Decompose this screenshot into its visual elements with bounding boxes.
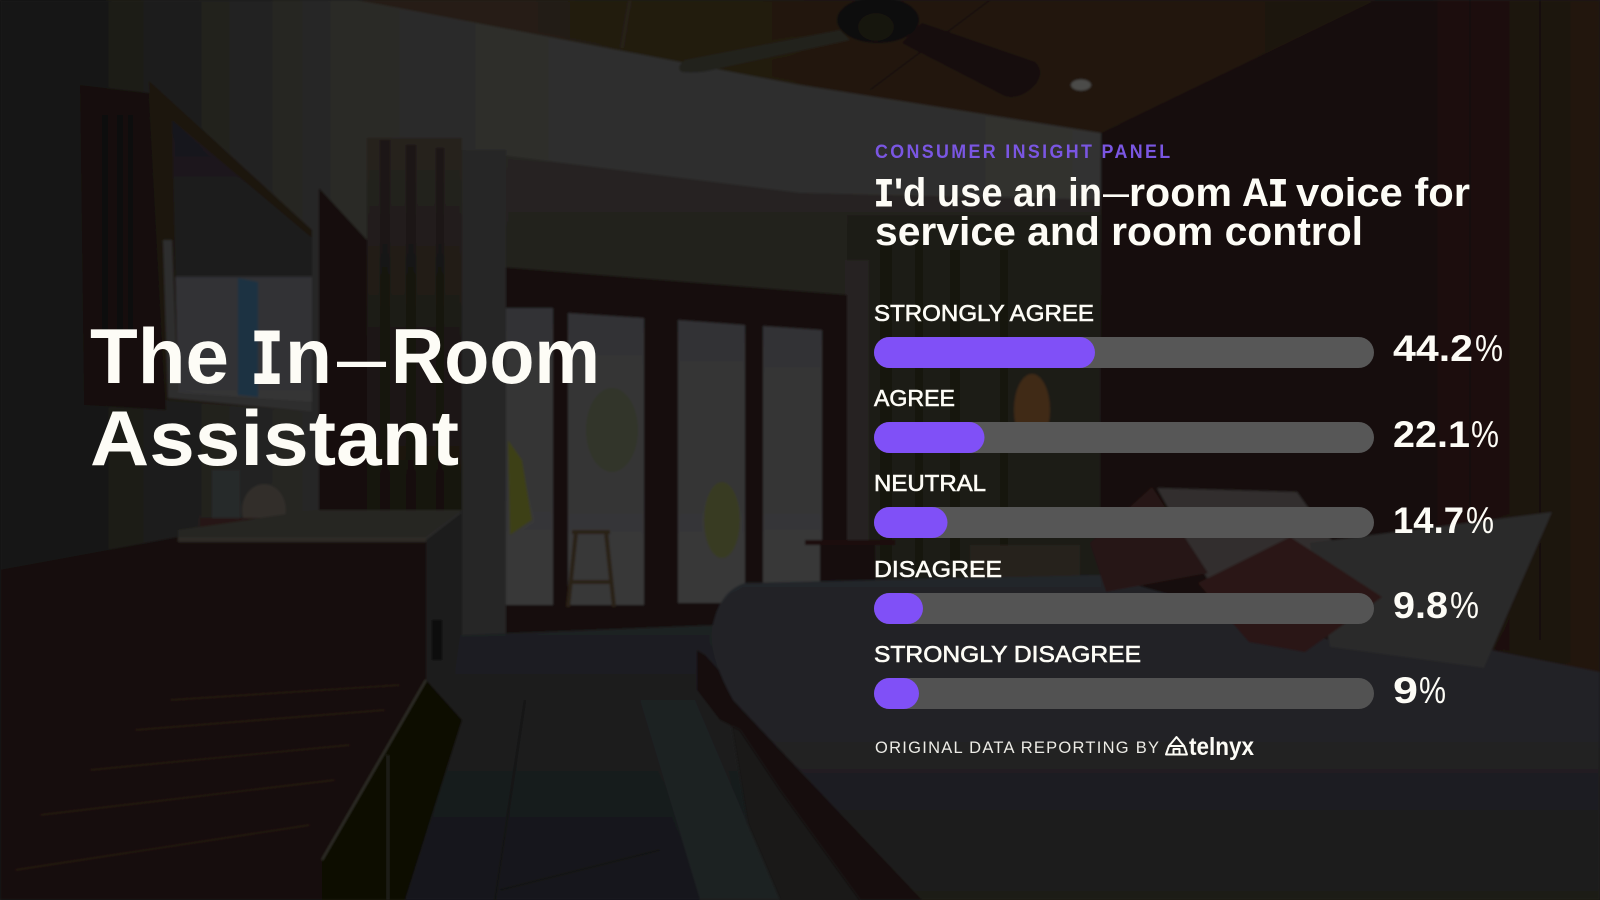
row: neutral bbox=[874, 470, 1494, 541]
cabinet side bbox=[426, 512, 462, 800]
ceiling fan blade right bbox=[902, 23, 1040, 97]
ceiling fan hub bbox=[837, 0, 919, 43]
door frame bbox=[500, 267, 847, 640]
eyebrow: consumer insight panel: CONSUMER INSIGHT PANEL bbox=[875, 140, 1170, 162]
side table bbox=[805, 540, 895, 545]
row: agree bbox=[874, 385, 1499, 455]
row: strongly agree: % bbox=[1475, 328, 1503, 369]
wood ceiling bbox=[357, 0, 1376, 133]
main title: — bbox=[337, 313, 386, 401]
row: agree: % bbox=[1471, 414, 1499, 455]
wall panel behind TV bbox=[80, 85, 166, 410]
TV frame bbox=[149, 81, 312, 412]
row: strongly agree: STRONGLY AGREE bbox=[874, 300, 1094, 326]
row: disagree: DISAGREE bbox=[874, 556, 1002, 582]
survey question heading: — bbox=[1103, 171, 1129, 215]
survey question heading: voice for bbox=[1296, 171, 1470, 215]
icon: telnyx logo mark bbox=[1166, 737, 1187, 754]
wainscot left bbox=[0, 537, 178, 900]
bench side bbox=[322, 680, 462, 900]
ceiling light bbox=[1071, 80, 1091, 90]
row: neutral: NEUTRAL bbox=[874, 470, 986, 496]
sheer curtain bbox=[462, 150, 506, 640]
main title: I bbox=[251, 319, 283, 407]
white pillow back bbox=[1157, 488, 1335, 580]
survey question heading: I bbox=[1268, 173, 1288, 218]
survey question heading: A bbox=[1242, 171, 1269, 215]
cabinet top bbox=[178, 510, 462, 537]
row: strongly disagree: STRONGLY DISAGREE bbox=[874, 641, 1141, 667]
TV screen bbox=[172, 120, 312, 402]
dark curtain bbox=[367, 138, 462, 510]
row: agree: AGREE bbox=[874, 385, 955, 411]
items on cabinet bbox=[212, 470, 240, 540]
wood wall right bbox=[1100, 0, 1600, 680]
duvet bbox=[712, 575, 1600, 900]
row: agree: 22.1 bbox=[1393, 414, 1470, 455]
main title: n bbox=[285, 312, 332, 400]
row: strongly disagree: % bbox=[1419, 670, 1446, 711]
row: disagree bbox=[874, 556, 1479, 626]
row: disagree: % bbox=[1450, 585, 1479, 626]
cabinet front bbox=[178, 542, 426, 692]
row: strongly agree bbox=[874, 300, 1503, 369]
survey question heading: room bbox=[1129, 171, 1232, 215]
row: strongly disagree bbox=[874, 641, 1446, 711]
main title: The bbox=[90, 312, 229, 400]
survey question heading bbox=[874, 171, 1470, 254]
far curtain bbox=[847, 215, 1100, 580]
telnyx wordmark: telnyx bbox=[1189, 733, 1254, 761]
survey question heading: 'd use an in bbox=[894, 171, 1102, 215]
survey question heading: service and room control bbox=[875, 210, 1363, 254]
main title bbox=[90, 312, 600, 482]
bench bbox=[0, 680, 426, 900]
red pillow right bbox=[1198, 537, 1382, 652]
footer: source credit: ORIGINAL DATA REPORTING BY bbox=[875, 739, 1159, 757]
bar chart: survey responses bbox=[874, 300, 1503, 711]
window panes bbox=[505, 308, 553, 605]
footer: source credit bbox=[875, 733, 1254, 761]
row: strongly disagree: 9 bbox=[1393, 670, 1418, 711]
stool bbox=[568, 532, 614, 607]
red pillow left bbox=[1090, 487, 1208, 592]
row: disagree: 9.8 bbox=[1393, 585, 1448, 626]
row: strongly agree: 44.2 bbox=[1393, 328, 1473, 369]
tapestry on wood wall bbox=[1225, 82, 1412, 430]
row: neutral: % bbox=[1466, 500, 1494, 541]
small wood frame bbox=[319, 188, 367, 515]
walls and soffit bbox=[0, 0, 1120, 640]
survey question heading: I bbox=[874, 173, 894, 218]
main title: Assistant bbox=[90, 394, 459, 482]
back wall bbox=[460, 150, 1110, 600]
row: neutral: 14.7 bbox=[1393, 500, 1464, 541]
main title: Room bbox=[391, 312, 600, 400]
bed frame bbox=[697, 650, 930, 900]
white pillow front bbox=[1310, 512, 1552, 668]
floor bbox=[380, 625, 760, 900]
pendant lamp bbox=[1014, 374, 1050, 446]
ceiling fan blade left bbox=[679, 30, 850, 72]
garden foliage bbox=[508, 440, 532, 535]
